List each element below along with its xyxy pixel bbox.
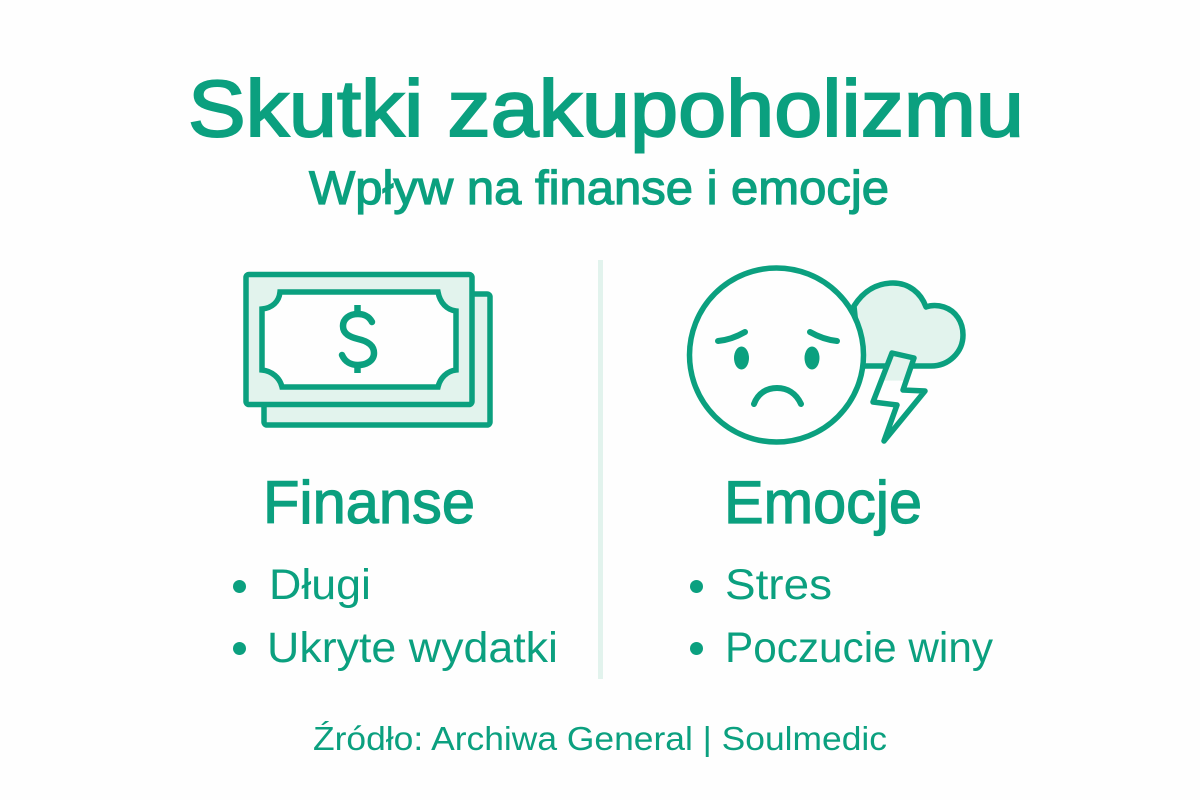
center divider	[598, 260, 603, 679]
icon: storm cloud	[854, 283, 963, 366]
heading: Emocje: Emocje	[724, 469, 922, 536]
list: finanse: Długi	[269, 561, 371, 609]
title: Skutki zakupoholizmu	[188, 64, 1024, 153]
list: emocje: Stres	[725, 561, 832, 609]
source: Źródło: Archiwa General | Soulmedic	[313, 720, 887, 757]
list: emocje	[690, 561, 993, 672]
panel: finanse	[233, 274, 558, 672]
subtitle: Wpływ na finanse i emocje	[309, 161, 889, 214]
list: emocje: Poczucie winy	[725, 624, 993, 672]
heading: Finanse: Finanse	[263, 469, 475, 536]
panel: emocje	[690, 268, 993, 672]
icon: sad face	[690, 268, 864, 442]
list: finanse	[233, 561, 558, 672]
icon: lightning bolt	[873, 353, 925, 441]
list: finanse: Ukryte wydatki	[267, 624, 558, 672]
icon: banknotes	[246, 274, 490, 425]
